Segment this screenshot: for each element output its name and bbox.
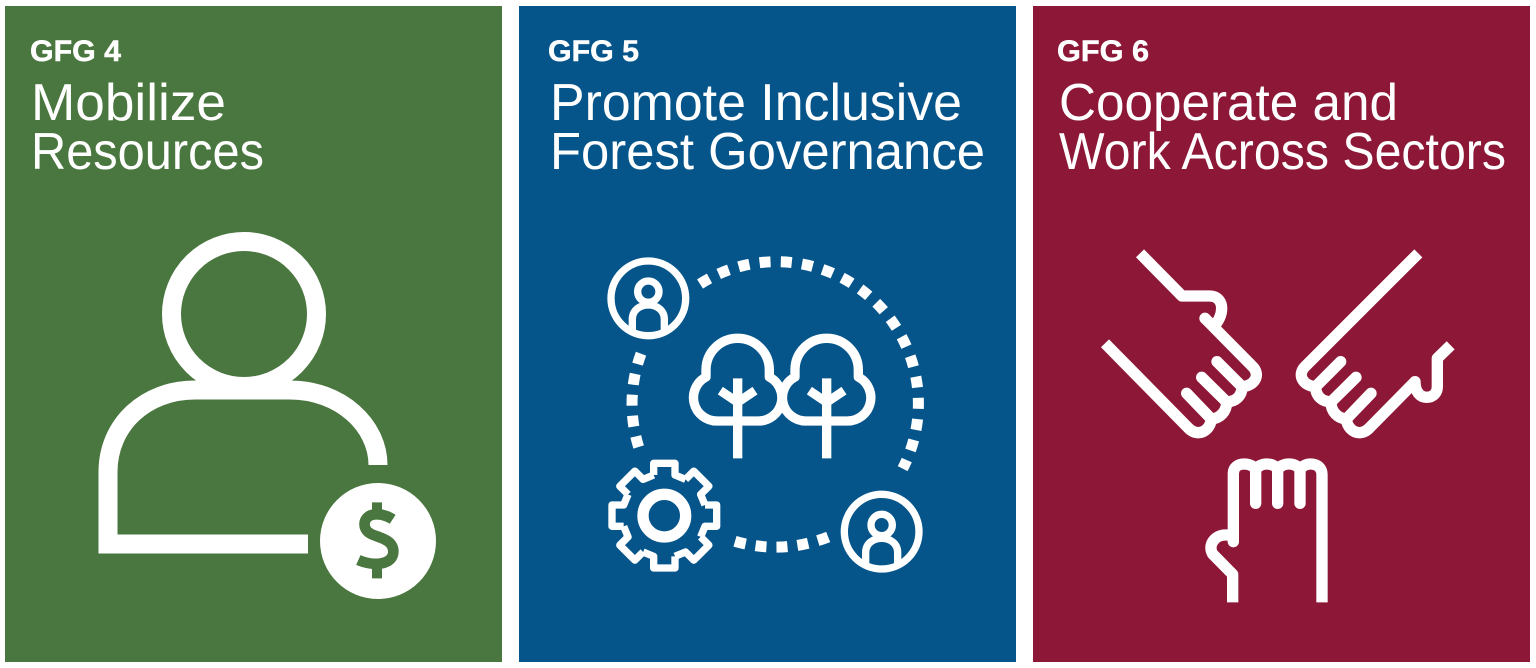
heading: Mobilize Resources: Resources bbox=[31, 123, 264, 181]
heading: Promote Inclusive Forest Governance: Promote Inclusive bbox=[550, 74, 962, 132]
heading: Mobilize Resources bbox=[31, 74, 264, 181]
label: GFG 6: GFG 6 bbox=[1057, 35, 1149, 68]
icon: forest governance cycle bbox=[611, 261, 919, 569]
label: GFG 5: GFG 5 bbox=[548, 35, 639, 68]
panel: GFG 4 Mobilize Resources bbox=[5, 6, 502, 662]
heading: Cooperate and Work Across Sectors: Work Across Sectors bbox=[1059, 123, 1506, 181]
label: GFG 4: GFG 4 bbox=[30, 35, 121, 68]
heading: Promote Inclusive Forest Governance bbox=[550, 74, 985, 181]
panel: GFG 5 Promote Inclusive Forest Governance bbox=[519, 6, 1016, 662]
icon: person with dollar coin bbox=[108, 242, 436, 599]
heading: Cooperate and Work Across Sectors bbox=[1059, 74, 1506, 181]
icon: three joined hands bbox=[1105, 253, 1451, 602]
heading: Promote Inclusive Forest Governance: Forest Governance bbox=[550, 123, 985, 181]
heading: Cooperate and Work Across Sectors: Cooperate and bbox=[1059, 74, 1398, 132]
panel: GFG 6 Cooperate and Work Across Sectors bbox=[1033, 6, 1530, 662]
heading: Mobilize Resources: Mobilize bbox=[31, 74, 226, 132]
